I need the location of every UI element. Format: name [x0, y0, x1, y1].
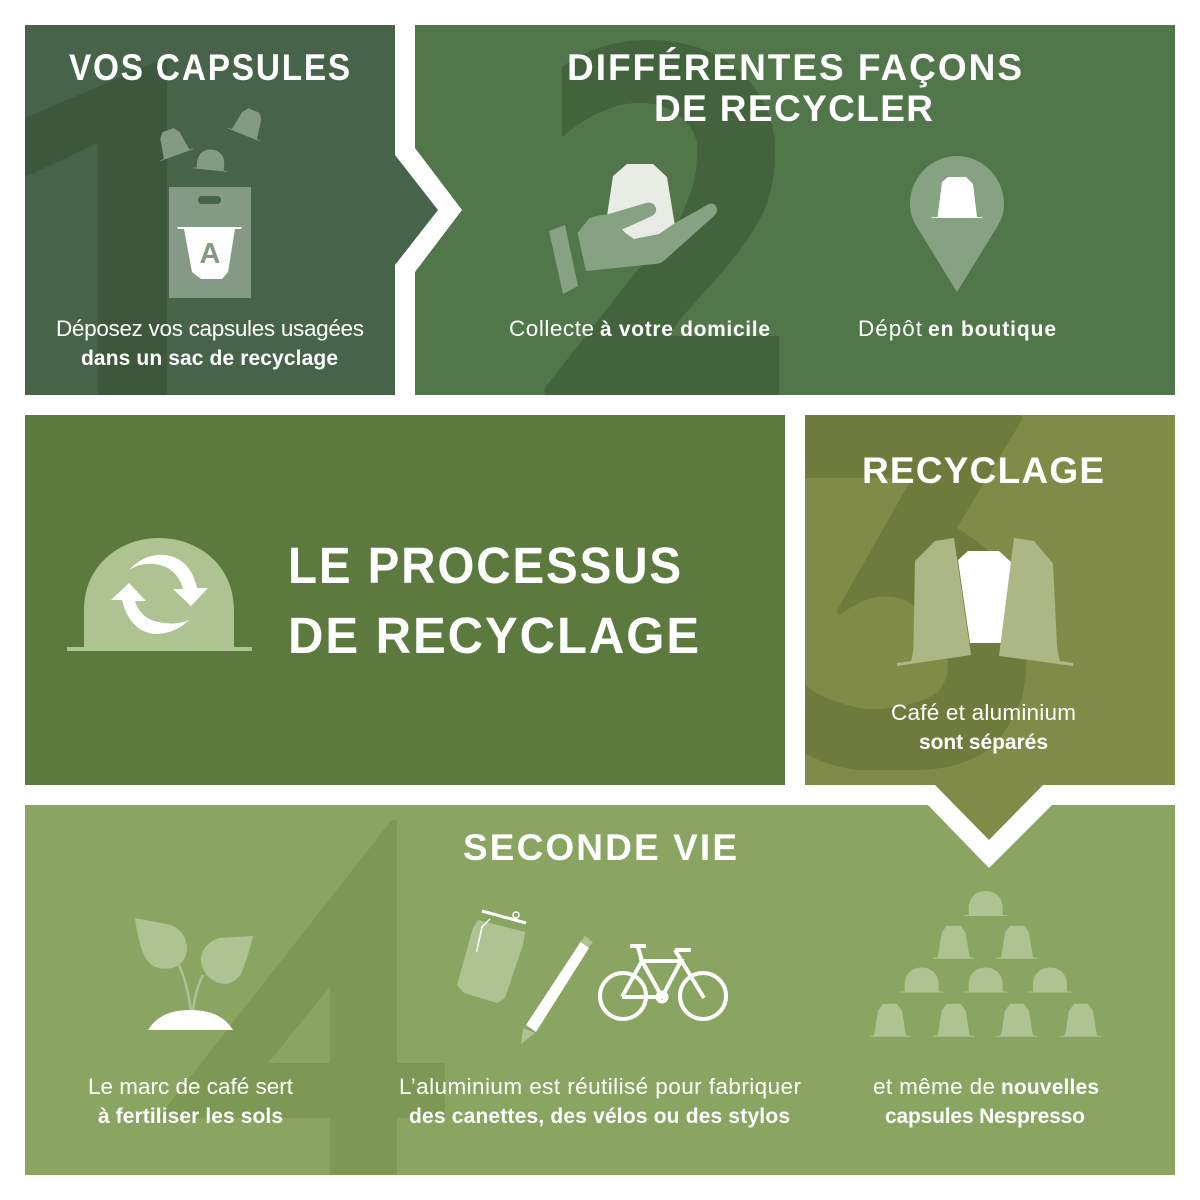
- icon: plant: [135, 918, 253, 1030]
- text: marc de café: [88, 1074, 294, 1128]
- panel: recyclage: [805, 415, 1175, 840]
- heading: le processus de recyclage: DE RECYCLAGE: [288, 607, 701, 664]
- icon: separated capsule: [897, 538, 1073, 666]
- text: collecte à votre domicile: à votre domicile: [600, 318, 770, 341]
- icon: recycling bag: A: [200, 238, 221, 270]
- text: aluminium réutilisé: des canettes, des vélos ou des stylos: [409, 1105, 790, 1128]
- text: collecte à votre domicile: [509, 316, 770, 341]
- text: nouvelles capsules: nouvelles: [1001, 1076, 1099, 1099]
- icon: pen: [521, 936, 593, 1044]
- heading: le processus de recyclage: [288, 537, 701, 664]
- icon: bicycle: [600, 946, 726, 1019]
- icon: capsule pyramid: [869, 891, 1102, 1037]
- icon: recycling capsule: [67, 538, 252, 651]
- panel: différentes façons de recycler: [415, 25, 1175, 395]
- panel: seconde vie: [25, 805, 1175, 1175]
- icon: hand holding capsule: [549, 164, 717, 294]
- text: dépôt en boutique: Dépôt: [858, 316, 923, 341]
- text: dépôt en boutique: [858, 316, 1056, 341]
- icon: location pin with capsule: [910, 156, 1004, 292]
- text: café et aluminium: [891, 700, 1076, 754]
- text: déposez vos capsules: dans un sac de recyclage: [81, 347, 338, 370]
- text: déposez vos capsules: [56, 316, 364, 370]
- text: aluminium réutilisé: [399, 1074, 802, 1128]
- text: déposez vos capsules: Déposez vos capsules usagées: [56, 316, 364, 341]
- number 3: [805, 415, 1027, 770]
- heading: recyclage: RECYCLAGE: [862, 450, 1104, 491]
- number 4: [158, 820, 445, 1175]
- text: aluminium réutilisé: L’aluminium est réutilisé pour fabriquer: [399, 1074, 802, 1099]
- number 1: [25, 57, 167, 395]
- icon: falling capsules: [151, 104, 270, 172]
- icon: can: [457, 911, 526, 1003]
- text: dépôt en boutique: en boutique: [928, 318, 1056, 341]
- number 2: [544, 40, 779, 395]
- text: marc de café: à fertiliser les sols: [98, 1105, 283, 1128]
- heading: le processus de recyclage: LE PROCESSUS: [288, 537, 683, 594]
- text: nouvelles capsules: capsules Nespresso: [885, 1105, 1085, 1128]
- text: café et aluminium: sont séparés: [919, 731, 1048, 754]
- heading: différentes façons de recycler: DIFFÉRENTES FAÇONS: [567, 47, 1022, 88]
- heading: différentes façons de recycler: DE RECYCLER: [654, 88, 933, 129]
- icon: recycling bag: [169, 187, 251, 298]
- heading: vos capsules: VOS CAPSULES: [69, 47, 352, 88]
- text: marc de café: Le marc de café sert: [88, 1074, 294, 1099]
- heading: différentes façons de recycler: [567, 47, 1022, 129]
- heading: seconde vie: SECONDE VIE: [463, 827, 737, 868]
- panel: vos capsules: [25, 25, 438, 395]
- text: café et aluminium: Café et aluminium: [891, 700, 1076, 725]
- text: nouvelles capsules: et même de: [873, 1074, 995, 1099]
- text: nouvelles capsules: [873, 1074, 1099, 1128]
- panel: le processus de recyclage: [25, 415, 785, 785]
- text: collecte à votre domicile: Collecte: [509, 316, 594, 341]
